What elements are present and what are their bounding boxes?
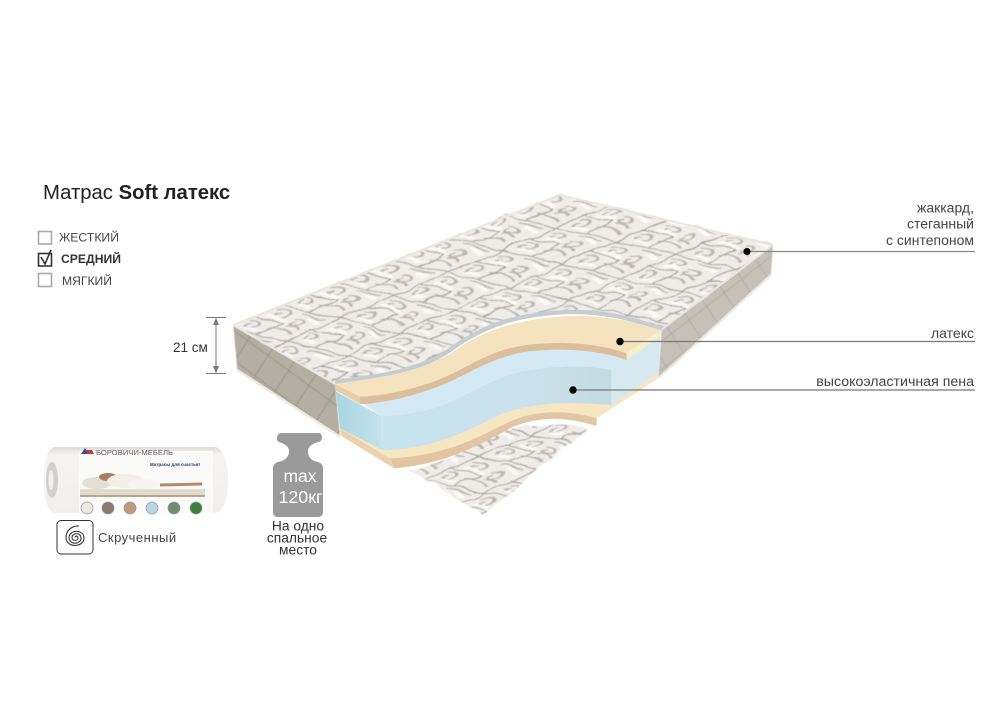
roll end	[46, 462, 58, 498]
callout: high elasticity foam: высокоэластичная пена	[816, 374, 974, 390]
weight note: На одно	[272, 518, 324, 534]
icon: weight limit: 120кг	[279, 487, 322, 507]
icon: weight limit	[273, 433, 323, 517]
icon: rolled spiral	[57, 520, 93, 554]
brand logo: БОРОВИЧИ-МЕБЕЛЬ	[96, 448, 173, 457]
upper latex left edge	[335, 384, 360, 404]
foam left side	[336, 392, 382, 450]
rolled mattress package	[44, 447, 228, 514]
foam top surface	[336, 332, 661, 416]
label area	[79, 451, 213, 513]
feature badges	[81, 502, 202, 514]
roll body	[44, 447, 228, 513]
foam front face	[382, 366, 612, 452]
callout: jacquard: стеганный	[907, 216, 974, 232]
top quilted surface	[233, 195, 773, 383]
icon: weight limit: max	[283, 466, 317, 486]
callout: high elasticity foam	[569, 374, 975, 394]
slogan: Матрасы для счастья!	[150, 462, 201, 467]
lower latex front edge	[390, 412, 597, 468]
weight note	[267, 518, 327, 558]
title: Матрас Soft латекс	[43, 182, 230, 204]
right base strip	[658, 275, 771, 378]
callout: latex: латекс	[931, 325, 974, 341]
option: soft: МЯГКИЙ	[62, 273, 112, 288]
mattress cutaway	[233, 195, 773, 515]
upper latex front edge	[360, 343, 627, 404]
label: rolled: Скрученный	[98, 530, 177, 545]
left side panel	[233, 326, 340, 437]
lower latex top surface	[340, 373, 658, 458]
foam right end	[612, 342, 660, 405]
callout: jacquard: с синтепоном	[886, 232, 974, 248]
option: medium (checked): СРЕДНИЙ	[61, 251, 121, 266]
left base strip	[237, 370, 340, 437]
sleeping person on mattress	[80, 473, 205, 497]
torn cover edge	[335, 312, 662, 382]
callout: latex	[616, 325, 975, 345]
right side panel	[658, 245, 773, 377]
top surface edge piping	[233, 195, 773, 384]
firmness selector	[38, 230, 121, 288]
lower latex left edge	[340, 428, 394, 468]
lower quilted surface	[408, 424, 588, 515]
option: hard: ЖЕСТКИЙ	[59, 230, 119, 244]
height dimension: 21 cm: 21 см	[173, 340, 208, 355]
callout: jacquard: жаккард,	[917, 200, 974, 216]
upper latex top surface	[335, 316, 661, 397]
weight note: место	[279, 542, 317, 558]
callout: jacquard	[744, 200, 975, 255]
weight note: спальное	[267, 530, 327, 546]
height dimension: 21 cm	[173, 318, 226, 374]
upper latex right strip	[627, 330, 661, 360]
